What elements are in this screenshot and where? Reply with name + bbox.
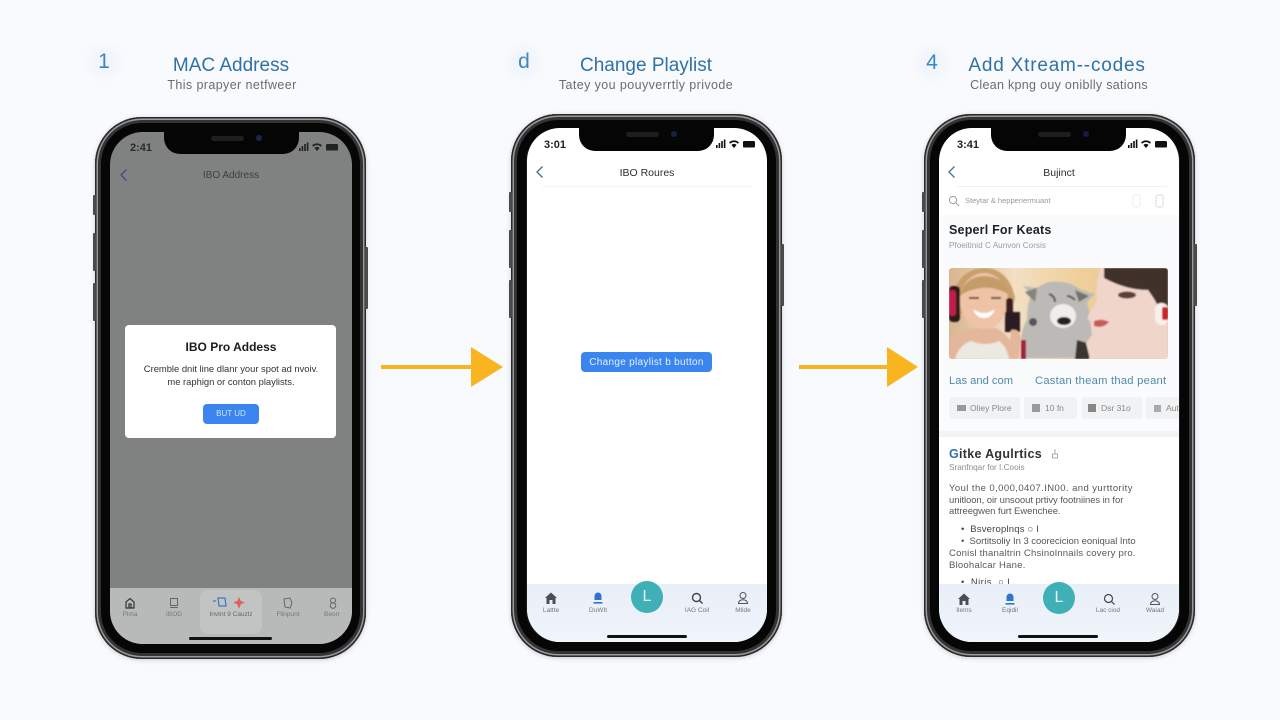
home indicator [607,635,687,638]
phone 2 status time: 3:01 [544,139,566,151]
bullet 1: • Bsveroplnqs ○ I [961,524,1039,535]
nav icon: search [692,592,703,604]
nav icon: user blue [594,592,602,604]
nav labels [123,611,340,618]
article paragraph 2: Conisl thanaltrin Chsinolnnails covery pro. [949,548,1136,559]
bullet 3: • Niris ○ I [961,577,1010,588]
nav icon: search [1104,594,1115,605]
phone 2 screen [527,128,767,642]
change playlist button [581,352,712,372]
change playlist button: Change playlist b button [589,357,704,368]
chip 1: Oliey Plore [970,403,1012,413]
phone 2 status icons [716,140,755,148]
phone 3 notch [991,128,1126,151]
phone 3 back chevron [948,166,955,178]
step 3 subheading: Clean kpng ouy oniblly sations [970,78,1148,92]
nav center circle: L [1055,589,1063,606]
nav labels: Mlide [735,607,751,614]
phone 1 title: IBO Address [203,170,259,181]
phone 1 bottom navigation [110,588,352,644]
article heading: Gitke Agulrtics [949,447,1042,461]
chip 2: 10 fn [1045,403,1064,413]
search placeholder: Steytar & hepperiermuant [965,196,1050,205]
nav center circle [1043,582,1075,614]
dialog button: BUT UD [216,409,246,418]
article subheading: Sranfnqar for I.Coois [949,463,1025,472]
step 3 number [910,41,954,85]
step 2 number [502,40,546,84]
nav labels: IAG Coil [685,607,709,614]
nav icon: profile [738,592,748,604]
nav icon: profile [330,598,336,609]
caption left: Las and com [949,375,1013,387]
article paragraph 2 [949,548,1136,571]
search icon [948,196,960,206]
nav center circle [631,581,663,613]
step 3 heading: Add Xtream--codes [968,55,1146,76]
section divider band [939,431,1179,437]
nav icon: profile [1150,593,1160,605]
chip 3: Dsr 31o [1101,403,1131,413]
nav icon: home [125,598,135,609]
phone 3 header divider [957,186,1167,187]
nav labels: IBOD [166,611,182,618]
phone 3 status time: 3:41 [957,139,979,151]
nav center circle: L [643,588,651,605]
nav labels: Lattte [543,607,559,614]
caption right: Castan theam thad peant [1035,375,1166,387]
nav labels: DuWIt [589,607,607,614]
chip 1 [949,397,1020,419]
nav labels: Flinpunt [276,611,300,618]
step 2 subheading: Tatey you pouyverrtly privode [559,78,733,92]
nav labels: Invtnt 9 Cauzlz [210,611,252,618]
phone 1 notch [164,132,299,154]
phone 1 status time: 2:41 [130,142,152,154]
bullet 2: • Sortitsoliy In 3 coorecicion eoniqual Into [961,536,1136,547]
nav labels: Pima [123,611,137,618]
phone 3 bottom navigation [939,584,1179,642]
article paragraph: attreegwen furt Ewenchee. [949,506,1061,517]
dialog text: Cremble dnit line dlanr your spot ad nvoiv. [144,363,318,374]
article paragraph: unitloon, oir unsoout prtivy footniines in for [949,495,1123,506]
nav icon: report [284,598,292,609]
chip 4 [1146,397,1186,419]
featured image collage [949,268,1168,359]
nav labels: Waiad [1146,607,1164,614]
phone 3: Xtream codes content [924,114,1195,657]
nav labels: Lac ciod [1096,607,1120,614]
nav icon: center blue and red [213,597,244,609]
icon: pointer [1052,449,1058,458]
home indicator [189,637,272,640]
chip 4: Aut [1166,403,1179,413]
phone 2: change playlist [511,114,782,657]
dialog text: me raphign or conton playlists. [167,376,295,387]
search right icons [1132,194,1164,208]
nav labels [543,607,751,614]
phone 1 screen [110,132,352,644]
dialog [125,325,336,438]
arrow 1 [381,347,503,387]
arrow 2 [799,347,918,387]
step 1 subheading: This prapyer netfweer [167,78,297,92]
nav icon: home [545,592,557,604]
step 2 heading: Change Playlist [580,55,712,76]
step 1 number: 1 [98,50,110,73]
chip 3 [1082,397,1142,419]
phone 1 back chevron [120,169,127,181]
dialog button [203,404,259,424]
search bar [948,194,1164,208]
nav icon: book [170,598,178,608]
article paragraph 2: Bloohalcar Hane. [949,560,1026,571]
section title: Seperl For Keats [949,223,1052,237]
dialog title: IBO Pro Addess [186,340,276,354]
nav labels: Eqidil [1002,607,1018,614]
phone 2 bottom navigation [527,584,767,642]
section subtitle: Pfoeitinid C Aunvon Corsis [949,241,1046,250]
step 1 heading: MAC Address [173,55,289,76]
nav labels [956,607,1164,614]
phone 2 notch [579,128,714,151]
phone 2 title: IBO Roures [620,167,674,179]
nav labels: Ilems [956,607,972,614]
home indicator [1018,635,1098,638]
step 1 number [82,40,126,84]
phone 1: MAC address dialog [95,117,366,659]
nav icon: home [958,594,970,605]
step 3 number: 4 [926,51,938,74]
phone 2 back chevron [536,166,543,178]
nav labels: Beorr [324,611,340,618]
nav center smudge [200,590,262,634]
article paragraph: Youl the 0,000,0407.IN00. and yurttority [949,483,1133,494]
nav icon: user blue [1006,594,1014,605]
section: featured [949,224,1168,386]
phone 1 status icons [299,142,338,151]
phone 3 screen [939,128,1179,642]
chip row [949,397,1179,419]
phone 2 header divider [542,186,752,187]
phone 3 title: Bujinct [1043,167,1075,179]
chip 2 [1024,397,1077,419]
dialog text [144,363,318,387]
article paragraph [949,483,1133,517]
phone 3 status icons [1128,140,1167,148]
step 2 number: d [518,50,530,73]
